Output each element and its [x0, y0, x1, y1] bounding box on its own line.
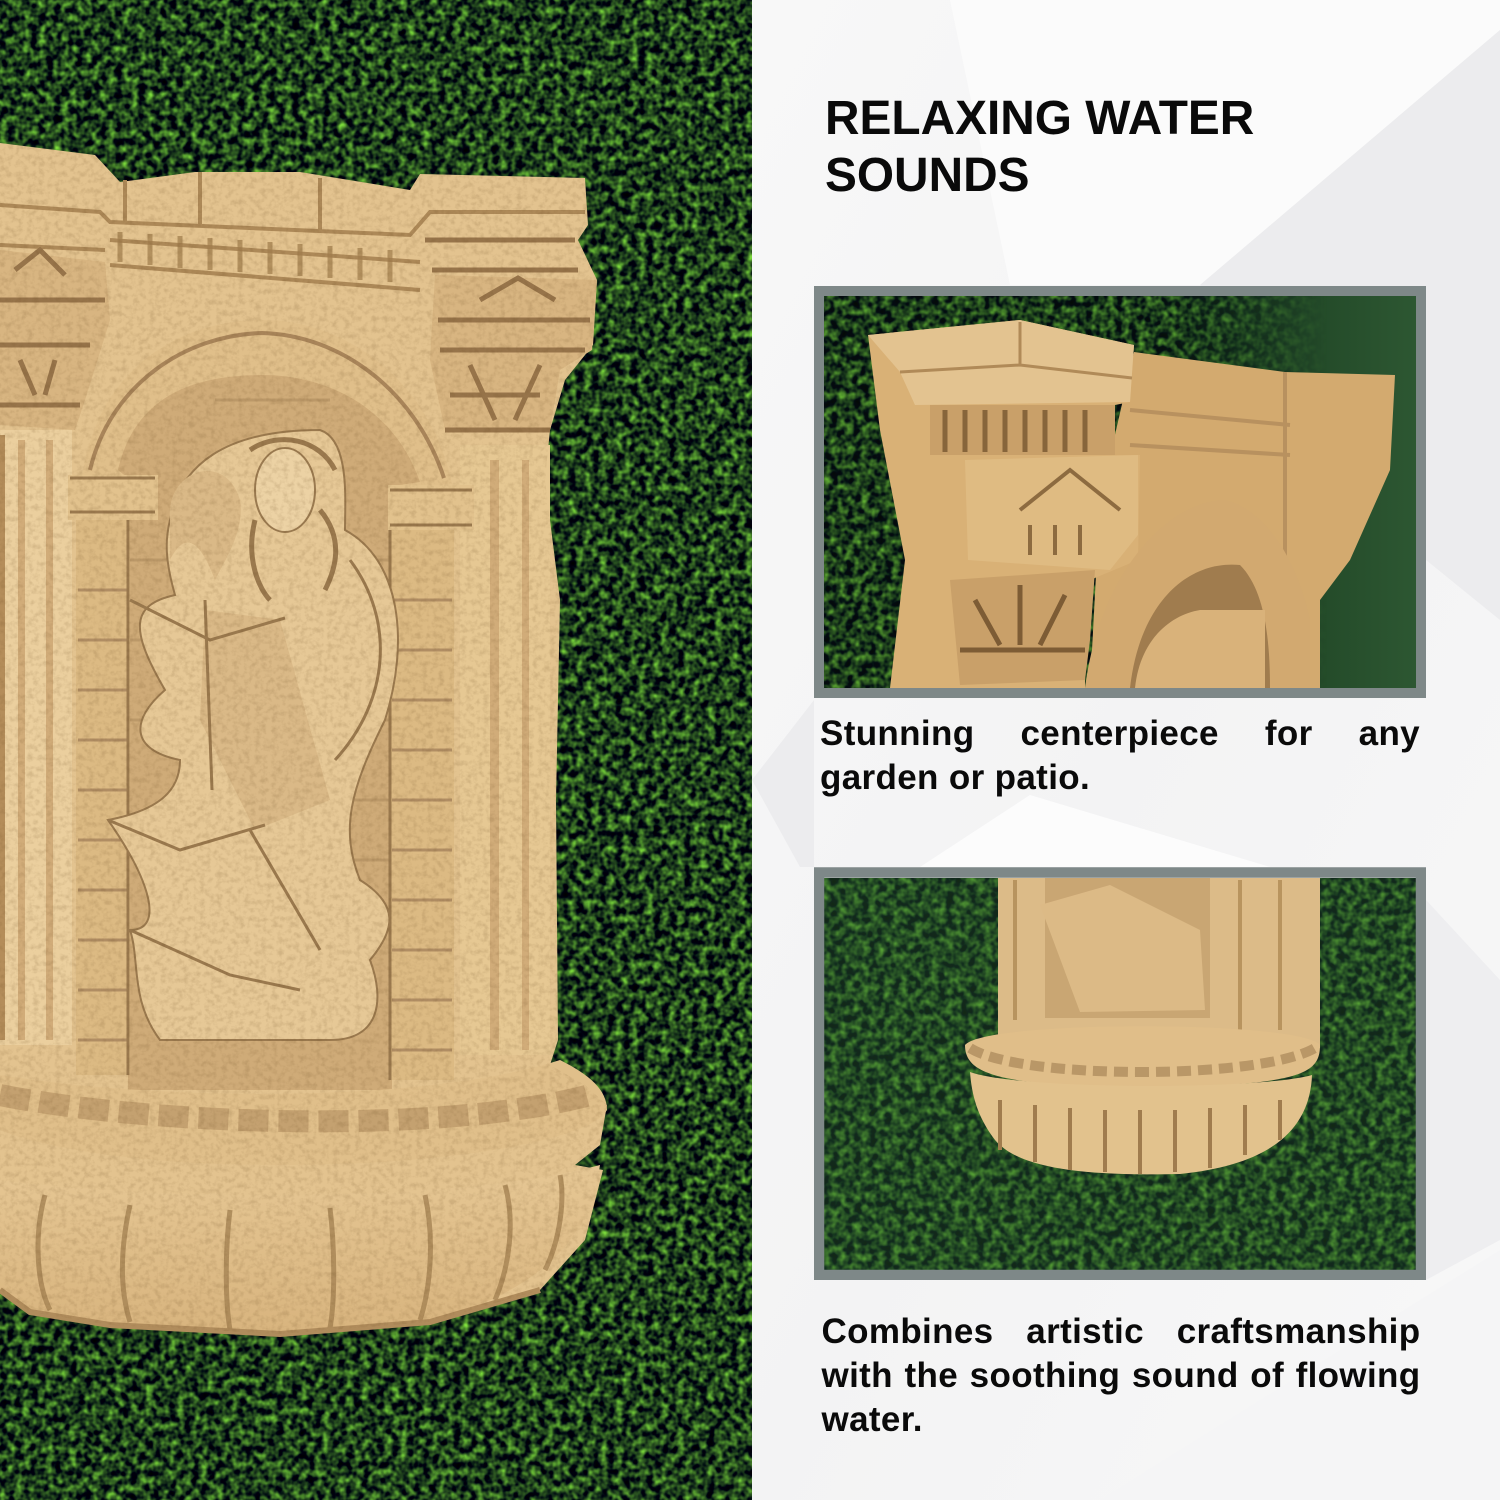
fountain body — [0, 143, 607, 1334]
inner pilasters — [68, 475, 158, 520]
caption: centerpiece: Stunning centerpiece for any garden or patio. — [820, 714, 1420, 797]
recess — [118, 375, 420, 1090]
arch band — [82, 320, 452, 1090]
stone texture — [0, 143, 607, 1334]
left photo: fountain on hedge wall — [0, 0, 752, 1500]
figure — [108, 430, 398, 1040]
frame — [819, 872, 1421, 1275]
title — [825, 92, 1254, 202]
background panel: light geometric — [752, 0, 1500, 1500]
photo: top capital close-up — [814, 286, 1426, 698]
title: SOUNDS — [825, 149, 1030, 202]
frame — [819, 291, 1421, 693]
right column — [460, 445, 550, 1055]
cornice — [0, 172, 585, 290]
caption: craftsmanship: Combines artistic craftsmanship with the soothing sound of flowing water. — [822, 1312, 1420, 1439]
title: RELAXING WATER — [825, 92, 1254, 145]
basin bowl — [0, 1165, 600, 1334]
photo: basin close-up — [814, 867, 1426, 1280]
left column — [0, 430, 72, 1045]
basin rim — [0, 1060, 607, 1165]
